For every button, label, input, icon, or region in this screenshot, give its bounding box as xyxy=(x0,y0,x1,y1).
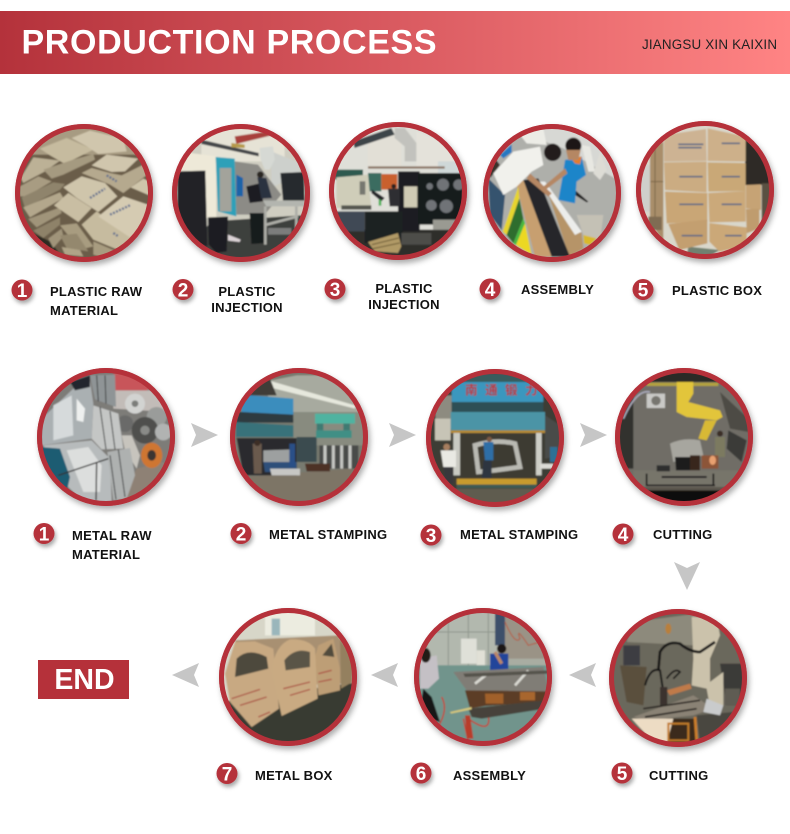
badge 1: 1 xyxy=(39,524,50,546)
arrow down xyxy=(674,562,700,590)
label: cutting: CUTTING xyxy=(653,527,713,542)
badge 2: 2 xyxy=(178,280,188,302)
photo: plastic injection hall xyxy=(325,118,475,268)
badge 1 xyxy=(12,280,32,302)
badge 6: 6 xyxy=(416,764,426,785)
label: plastic injection: PLASTIC xyxy=(375,281,433,296)
photo: robot cutting sparks xyxy=(603,602,753,752)
photo: assembly workers xyxy=(480,122,630,272)
badge 2 xyxy=(230,523,252,546)
panel: metal process row bottom xyxy=(38,602,753,786)
label: metal raw material: METAL RAW xyxy=(72,528,152,543)
label: plastic injection: INJECTION xyxy=(211,300,283,315)
badge 4: 4 xyxy=(618,525,629,546)
badge 6 xyxy=(410,762,432,785)
badge 2 xyxy=(172,279,194,302)
photo: metal assembly xyxy=(408,602,558,752)
badge 1: 1 xyxy=(17,281,28,302)
arrow left 1 xyxy=(569,663,596,687)
arrow right 3 xyxy=(580,423,607,447)
label: plastic raw material: PLASTIC RAW xyxy=(50,284,143,299)
photo: stamping press: 南通锻力 xyxy=(465,383,545,398)
photo: robot cutting xyxy=(610,362,760,512)
photo: plastic raw material bags xyxy=(10,118,160,268)
badge 7 xyxy=(216,763,238,786)
label: assembly: ASSEMBLY xyxy=(521,282,594,297)
badge 5 xyxy=(632,279,654,302)
badge 3: 3 xyxy=(330,280,340,301)
arrow left 2 xyxy=(371,663,398,687)
label: plastic injection: INJECTION xyxy=(368,297,440,312)
end box xyxy=(38,660,129,699)
end box: END xyxy=(54,664,115,696)
badge 2: 2 xyxy=(236,524,246,546)
label: plastic raw material: MATERIAL xyxy=(50,303,118,318)
panel: plastic process row xyxy=(10,115,780,318)
label: plastic box: PLASTIC BOX xyxy=(672,283,762,298)
label: metal stamping: METAL STAMPING xyxy=(269,527,387,542)
panel: metal process row top xyxy=(30,362,760,562)
photo: stamping press xyxy=(420,362,570,512)
label: metal stamping: METAL STAMPING xyxy=(460,527,578,542)
badge 5 xyxy=(612,762,632,785)
label: cutting: CUTTING xyxy=(649,768,709,783)
badge 4 xyxy=(480,278,500,301)
title: PRODUCTION PROCESS xyxy=(22,23,436,61)
header banner xyxy=(0,11,790,74)
photo: plastic injection machine xyxy=(168,118,318,268)
badge 5: 5 xyxy=(638,280,649,302)
badge 4 xyxy=(612,524,634,546)
badge 5: 5 xyxy=(617,764,628,785)
badge 7: 7 xyxy=(222,764,232,786)
arrow right 1 xyxy=(191,423,218,447)
badge 3 xyxy=(420,524,442,547)
badge 4: 4 xyxy=(485,280,496,301)
arrow right 2 xyxy=(389,423,416,447)
photo: metal coils xyxy=(30,362,180,512)
label: metal box: METAL BOX xyxy=(255,768,333,783)
label: metal raw material: MATERIAL xyxy=(72,547,140,562)
company name: JIANGSU XIN KAIXIN xyxy=(642,37,777,52)
badge 3: 3 xyxy=(426,526,436,547)
arrow left 3 xyxy=(172,663,199,687)
badge 3 xyxy=(324,278,346,301)
label: plastic injection: PLASTIC xyxy=(218,284,276,299)
photo: plastic box stacks xyxy=(630,115,780,265)
photo: metal box cartons xyxy=(215,602,365,752)
photo: metal stamping hall xyxy=(227,362,377,512)
label: assembly: ASSEMBLY xyxy=(453,768,526,783)
badge 1 xyxy=(34,523,54,546)
